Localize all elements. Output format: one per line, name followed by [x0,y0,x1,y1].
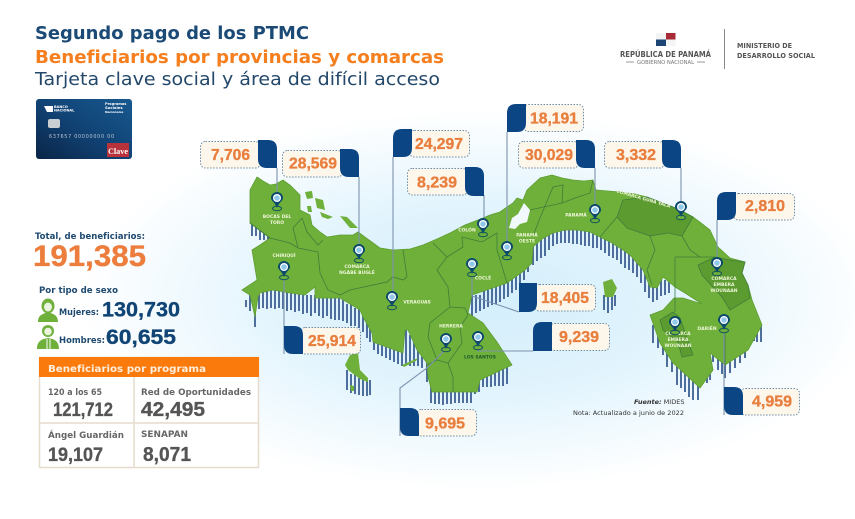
callout: 30,029 Panamá: 30,029 [525,147,573,164]
mainland [242,175,762,392]
icon: clave social card: Clave [108,147,128,156]
callout: 8,239 Colón [408,167,484,196]
map labels: PANAMÁ [565,212,587,218]
map labels: VERAGUAS [403,300,431,306]
callout: 3,332 Guna Yala [604,140,681,168]
panel: beneficiaries by programme: 42,495 [141,399,205,421]
callout: 4,959 Darién [724,387,800,415]
islands [305,191,617,391]
map labels: EMBERA [667,337,689,343]
canal lake [509,203,530,229]
beneficiaries by sex [37,286,180,349]
callout: 9,239 Los Santos: 9,239 [559,329,599,346]
darker comarca regions [617,197,750,357]
icon: clave social card: Sociales [105,105,123,110]
icon: clave social card: Programas [105,102,126,106]
callout: 3,332 Guna Yala: 3,332 [616,147,656,164]
total beneficiaries: Total, de beneficiarios: [35,232,145,242]
map labels: TORO [270,220,284,226]
callout: 7,706 Bocas del Toro [200,140,277,168]
callout: 2,810 Emberá Wounaan: 2,810 [745,198,785,215]
map labels: COMARCA [665,331,691,337]
icon: clave social card: NACIONAL [54,108,75,112]
map labels: NGÄBE BUGLÉ [339,268,375,276]
beneficiaries by sex: Por tipo de sexo [39,286,118,296]
callout: 9,239 Los Santos [533,322,610,351]
map labels: WOUNAAN [665,343,692,349]
map labels: HERRERA [439,324,463,330]
icon: clave social card: 637657 00000000 00 [49,134,114,140]
panel: beneficiaries by programme: 120 a los 65 [48,388,102,398]
callout: 18,405 Coclé [519,283,596,312]
logo: government and ministry: DESARROLLO SOCIAL [737,52,816,60]
map labels: OESTE [519,238,535,244]
panel: beneficiaries by programme [39,357,259,468]
callout: 18,191 Panamá Oeste [507,104,584,132]
icon: woman [38,298,58,322]
panel: beneficiaries by programme: Beneficiarios por programa [48,364,206,375]
title: Tarjeta clave social y área de difícil acceso [34,69,440,90]
coastal hatching [246,222,761,405]
panel: beneficiaries by programme: 8,071 [143,444,191,466]
source note: Nota: Actualizado a junio de 2022 [573,409,684,417]
beneficiaries by sex: 130,730 [102,298,180,322]
logo: government and ministry: REPÚBLICA DE PANAMÁ [620,50,711,59]
map labels: COLÓN [458,226,476,234]
callout: 2,810 Emberá Wounaan [717,192,794,220]
panel: beneficiaries by programme: SENAPAN [141,430,188,440]
beneficiaries by sex: Mujeres: [59,308,99,318]
callout: 24,297 Veraguas [393,129,470,157]
panel: beneficiaries by programme: 19,107 [48,445,103,466]
icon: man [37,325,59,349]
source note: Fuente: MIDES [634,398,684,406]
beneficiaries by sex: Hombres: [59,336,105,346]
callout: 18,191 Panamá Oeste: 18,191 [530,110,578,128]
icon: clave social card: BANCO [54,105,68,109]
map labels [263,188,738,360]
callout: 9,695 Herrera: 9,695 [425,416,465,432]
callout: 9,695 Herrera [400,408,476,436]
callout: 25,914 Chiriquí [284,326,360,354]
callout: 28,569 Ngäbe Buglé: 28,569 [289,156,337,172]
pins [271,192,730,352]
map labels: COMARCA [711,276,737,282]
callout: 30,029 Panamá [518,140,595,168]
map labels: CHIRIQUÍ [272,251,296,259]
map labels: COMARCA GUNA YALA [616,188,671,210]
leader lines [277,132,724,436]
map labels: EMBERA [713,282,735,288]
title: Segundo pago de los PTMC [35,23,309,44]
panel: beneficiaries by programme: 121,712 [53,400,113,421]
map labels: BOCAS DEL [263,214,291,220]
province borders [250,180,725,392]
callout: 4,959 Darién: 4,959 [752,394,792,410]
map labels: PANAMÁ [516,232,538,238]
map labels: LOS SANTOS [464,354,496,360]
map labels: DARIÉN [697,324,717,332]
callout: 18,405 Coclé: 18,405 [541,290,589,307]
icon: clave social card [36,99,132,159]
panel: beneficiaries by programme: Ángel Guardián [48,429,124,441]
logo: government and ministry: GOBIERNO NACIONAL [637,60,694,66]
logo: government and ministry [620,29,816,69]
title: Beneficiarios por provincias y comarcas [35,47,444,68]
logo: government and ministry: MINISTERIO DE [737,42,792,50]
callout: 25,914 Chiriquí: 25,914 [308,333,356,350]
total beneficiaries: 191,385 [33,240,146,273]
callout: 24,297 Veraguas: 24,297 [415,136,463,153]
title [34,23,444,90]
icon: clave social card: Nacionales [105,110,124,114]
callout: 28,569 Ngäbe Buglé [282,149,359,177]
source note [573,398,684,417]
map of Panama [242,175,762,405]
map labels: COCLÉ [475,274,491,282]
callout: 8,239 Colón: 8,239 [417,174,457,192]
callout: 7,706 Bocas del Toro: 7,706 [211,147,250,164]
panel: beneficiaries by programme: Red de Oportunidades [141,388,251,398]
map labels: COMARCA [344,264,370,270]
beneficiaries by sex: 60,655 [106,326,176,349]
map labels: WOUNAAN [711,288,738,294]
